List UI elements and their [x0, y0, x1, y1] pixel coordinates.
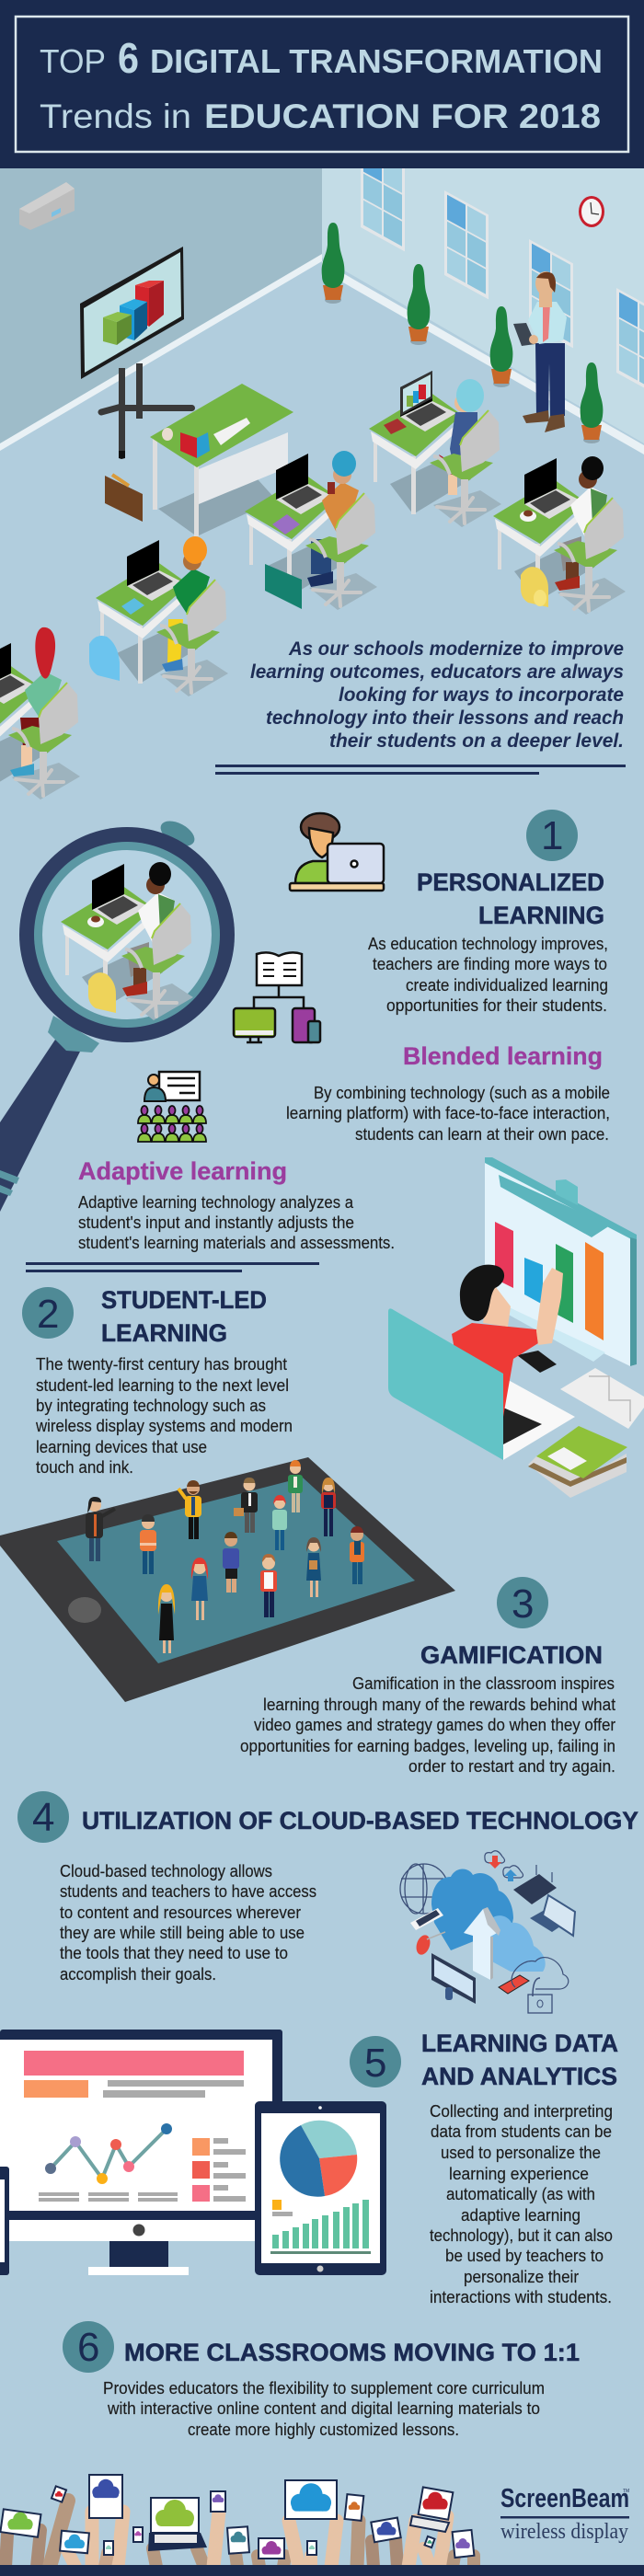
heading: gamification: GAMIFICATION — [420, 1641, 603, 1669]
isometric student at whiteboard with laptop — [388, 1157, 644, 1498]
heading: student-led learning: LEARNING — [101, 1319, 227, 1347]
pie chart — [280, 2121, 357, 2197]
text: adaptive learning: Adaptive learning technology analyzes a — [78, 1193, 354, 1212]
text: learning data and analytics: interactions with students. — [430, 2288, 612, 2306]
room background illustration — [0, 168, 644, 828]
monitor with dashboard — [0, 2030, 282, 2275]
text: learning data and analytics: technology), but it can also — [430, 2226, 613, 2245]
text: cloud-based technology: the tools that they need to use to — [60, 1944, 288, 1962]
text: adaptive learning: student's input and instantly adjusts the — [78, 1213, 354, 1232]
text: personalized learning: teachers are finding more ways to — [373, 955, 607, 973]
text: personalized learning: As education technology improves, — [368, 935, 608, 953]
title: TOP — [40, 42, 106, 80]
teal briefcase — [265, 564, 302, 609]
number 3 badge: 3 — [512, 1581, 534, 1627]
title: Trends in — [40, 98, 191, 135]
text: learning data and analytics: Collecting and interpreting — [430, 2102, 613, 2121]
text: blended learning: students can learn at their own pace. — [355, 1125, 609, 1144]
yellow backpack — [521, 567, 548, 607]
text: cloud-based technology: students and teachers to have access — [60, 1882, 316, 1901]
number 1 badge: 1 — [541, 813, 563, 858]
text: more classrooms: create more highly customized lessons. — [188, 2421, 459, 2439]
text: adaptive learning — [78, 1193, 395, 1252]
intro paragraph: technology into their lessons and reach — [266, 707, 624, 729]
number 1 badge — [526, 810, 578, 861]
text: learning data and analytics: be used by teachers to — [445, 2247, 604, 2265]
logo: ScreenBeam wireless display: TM — [623, 2489, 629, 2494]
student desk: black hair — [493, 456, 626, 615]
text: learning data and analytics — [430, 2102, 613, 2306]
purple book and cup — [272, 482, 335, 535]
text: cloud-based technology: to content and resources wherever — [60, 1903, 301, 1922]
title — [40, 34, 603, 135]
text: personalized learning: create individualized learning — [406, 976, 608, 995]
laptop chart on teal hair desk — [384, 371, 432, 434]
icon: teacher with classroom — [138, 1072, 206, 1142]
text: gamification: learning through many of the rewards behind what — [263, 1696, 615, 1714]
text: learning data and analytics: automatically (as with — [446, 2185, 595, 2203]
text: learning data and analytics: learning experience — [449, 2165, 589, 2183]
title: 6 — [118, 34, 139, 82]
text: student-led learning: learning devices that use — [36, 1438, 207, 1456]
text: cloud-based technology: accomplish their goals. — [60, 1965, 216, 1984]
coffee cup on desk — [520, 510, 536, 522]
intro paragraph: looking for ways to incorporate — [339, 684, 624, 706]
number 2 badge — [22, 1287, 74, 1339]
blue backpack — [89, 636, 120, 681]
display board on stand — [80, 247, 195, 459]
heading: learning data and analytics: AND ANALYTICS — [421, 2063, 617, 2090]
text: student-led learning: wireless display systems and modern — [35, 1417, 293, 1435]
number 5 badge — [350, 2036, 401, 2087]
chart legend — [192, 2138, 246, 2202]
heading: student-led learning: STUDENT-LED — [101, 1286, 267, 1314]
intro paragraph: their students on a deeper level. — [329, 730, 624, 752]
student desk: orange hair — [96, 536, 228, 696]
heading: personalized learning: LEARNING — [478, 902, 604, 929]
text: gamification: opportunities for earning badges, leveling up, failing in — [240, 1737, 615, 1755]
text: learning data and analytics: personalize their — [464, 2268, 579, 2286]
text: cloud-based technology: Cloud-based technology allows — [60, 1862, 272, 1880]
number 4 badge: 4 — [32, 1795, 54, 1840]
cloud technology illustration — [400, 1851, 575, 2013]
student desk: teal hair — [369, 371, 501, 527]
bar chart — [272, 2200, 369, 2248]
text: student-led learning: by integrating technology such as — [36, 1397, 266, 1415]
text: student-led learning — [35, 1355, 293, 1477]
front teacher table — [150, 384, 293, 536]
clock — [579, 196, 604, 227]
logo: ScreenBeam wireless display — [500, 2484, 629, 2544]
text: cloud-based technology — [60, 1862, 316, 1984]
teacher with tablet — [513, 271, 567, 432]
text: learning data and analytics: used to personalize the — [441, 2144, 601, 2162]
bottom bar — [0, 2565, 644, 2576]
text: more classrooms: with interactive online content and digital learning materials to — [107, 2399, 540, 2418]
windows — [361, 143, 644, 397]
text: personalized learning: opportunities for their students. — [386, 996, 607, 1015]
intro paragraph — [250, 638, 624, 752]
text: more classrooms — [103, 2379, 545, 2439]
heading: learning data and analytics — [421, 2030, 618, 2090]
student desk: blue hair — [245, 451, 377, 610]
heading: learning data and analytics: LEARNING DATA — [421, 2030, 618, 2057]
number 4 badge — [17, 1791, 69, 1843]
air conditioner — [19, 182, 75, 230]
heading: more classrooms moving to 1:1: MORE CLASSROOMS MOVING TO 1:1 — [124, 2339, 580, 2366]
text: student-led learning: student-led learning to the next level — [36, 1376, 289, 1395]
magnified student — [61, 862, 193, 1020]
plants — [322, 223, 603, 443]
title: DIGITAL TRANSFORMATION — [150, 42, 603, 80]
number 6 badge: 6 — [77, 2325, 99, 2370]
intro paragraph: learning outcomes, educators are always — [250, 661, 624, 683]
text: gamification: video games and strategy games do when they offer — [254, 1716, 615, 1734]
text: blended learning: learning platform) with face-to-face interaction, — [286, 1104, 610, 1122]
icon: student at laptop — [290, 813, 384, 891]
briefcase — [105, 475, 143, 522]
text: personalized learning — [368, 935, 608, 1015]
raised hands with devices — [0, 2475, 474, 2567]
heading: student-led learning — [101, 1286, 267, 1347]
text: blended learning — [286, 1084, 610, 1144]
subheading: blended learning: Blended learning — [403, 1042, 603, 1070]
text: gamification — [240, 1674, 615, 1776]
heading: personalized learning — [417, 868, 604, 929]
text: gamification: order to restart and try again. — [408, 1757, 615, 1776]
person figures — [86, 1460, 364, 1653]
header banner — [0, 0, 644, 168]
text: learning data and analytics: data from students can be — [431, 2122, 612, 2141]
text: gamification: Gamification in the classroom inspires — [352, 1674, 615, 1693]
number 3 badge — [497, 1577, 548, 1628]
giant tablet with students — [0, 1457, 455, 1702]
heading: personalized learning: PERSONALIZED — [417, 868, 604, 896]
text: more classrooms: Provides educators the flexibility to supplement core curriculum — [103, 2379, 545, 2398]
intro paragraph: As our schools modernize to improve — [288, 638, 624, 660]
text: student-led learning: The twenty-first century has brought — [36, 1355, 287, 1374]
text: adaptive learning: student's learning materials and assessments. — [78, 1234, 395, 1252]
logo: ScreenBeam wireless display: wireless display — [500, 2520, 628, 2544]
text: blended learning: By combining technology (such as a mobile — [314, 1084, 610, 1102]
number 2 badge: 2 — [37, 1292, 59, 1337]
text: learning data and analytics: adaptive learning — [461, 2206, 581, 2225]
number 6 badge — [63, 2321, 114, 2373]
icon: book and devices network — [234, 952, 320, 1042]
heading: cloud-based technology: UTILIZATION OF CLOUD-BASED TECHNOLOGY — [82, 1807, 638, 1834]
number 5 badge: 5 — [364, 2041, 386, 2086]
student desk: red hair — [0, 627, 80, 799]
tablet with pie and bar charts — [255, 2101, 386, 2275]
text: cloud-based technology: they are while still being able to use — [60, 1924, 305, 1942]
subheading: adaptive learning: Adaptive learning — [78, 1157, 287, 1185]
title: EDUCATION FOR 2018 — [204, 98, 601, 135]
magnifying glass — [0, 816, 235, 1212]
small left tablet — [0, 2167, 9, 2275]
line chart — [45, 2123, 172, 2184]
text: student-led learning: touch and ink. — [36, 1458, 133, 1477]
